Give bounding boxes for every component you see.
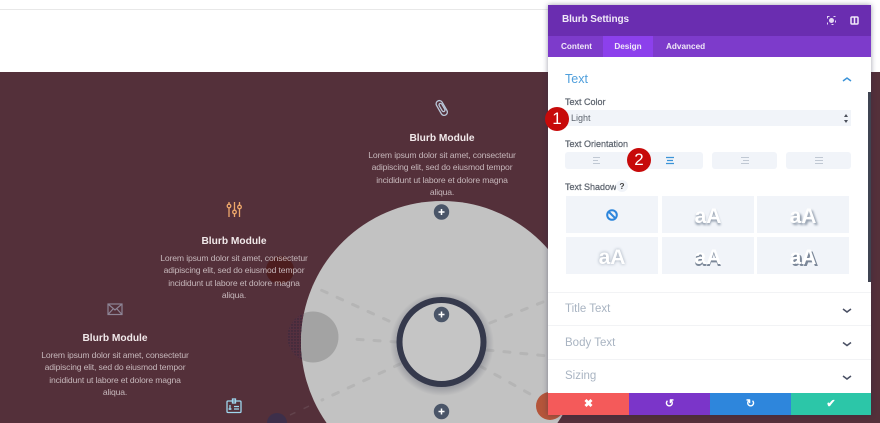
- shadow option: none: [566, 196, 658, 233]
- blurb: left: Blurb Module: [82, 333, 148, 344]
- panel header: [548, 5, 871, 36]
- blurb: middle: incididunt ut labore et dolore magna: [168, 278, 300, 288]
- blurb: left: incididunt ut labore et dolore magna: [49, 375, 181, 385]
- icon: header controls: [827, 16, 859, 25]
- blurb: left: [41, 333, 189, 397]
- footer: undo: ↺: [665, 398, 674, 410]
- footer: save: [791, 393, 871, 415]
- blurb: top: incididunt ut labore et dolore magna: [376, 175, 508, 185]
- blurb: top: Blurb Module: [409, 133, 475, 144]
- scrollbar: [868, 92, 871, 282]
- icon: select arrows: [844, 114, 848, 123]
- accordion: Body Text: Body Text: [565, 337, 615, 349]
- panel title: Blurb Settings: [562, 14, 629, 25]
- decorative dark red circle: [266, 256, 294, 284]
- accordion: Sizing: Sizing: [565, 370, 596, 382]
- shadow option: glow: [566, 237, 658, 274]
- shadow option: hard bottom right: aA: [790, 246, 816, 269]
- blurb: top: aliqua.: [430, 187, 454, 197]
- blurb: middle: adipiscing elit, sed do eiusmod tempor: [164, 265, 304, 275]
- shadow option: bottom: [662, 196, 754, 233]
- blurb: middle: aliqua.: [222, 290, 246, 300]
- shadow option: hard bottom right: [757, 237, 849, 274]
- icon: id badge: [227, 399, 241, 412]
- button: justify: [786, 152, 851, 169]
- icon: paperclip: [435, 99, 449, 117]
- select: Light: [565, 110, 851, 126]
- dashed spokes: [310, 285, 548, 404]
- plus button: bottom: [434, 404, 449, 419]
- label: Text Orientation: Text Orientation: [565, 139, 628, 149]
- shadow option: hard bottom: aA: [695, 246, 721, 269]
- footer: cancel: ✖: [584, 398, 593, 410]
- section heading: Text: Text: [565, 72, 588, 86]
- footer: redo: ↻: [746, 398, 755, 410]
- blurb: top: Lorem ipsum dolor sit amet, consectetur: [368, 150, 516, 160]
- button: align centre: [638, 152, 703, 169]
- icon: sliders: [227, 202, 241, 217]
- accordion: Title Text: Title Text: [565, 303, 610, 315]
- divider: [548, 359, 871, 360]
- footer: redo: [710, 393, 791, 415]
- shadow option: glow: aA: [599, 246, 625, 269]
- icon: envelope: [108, 304, 122, 314]
- tab: Design: Design: [614, 42, 642, 51]
- blurb: middle: [160, 236, 308, 300]
- blurb: top: [368, 133, 516, 197]
- large grey circle: [301, 201, 583, 423]
- footer: undo: [629, 393, 710, 415]
- blurb: left: Lorem ipsum dolor sit amet, consectetur: [41, 350, 189, 360]
- help badge: [616, 180, 628, 192]
- faint dashes outside circle: [290, 400, 322, 415]
- label: Text Color: Text Color: [565, 97, 606, 107]
- label: Text Shadow: Text Shadow: [565, 182, 617, 192]
- button: align left: [565, 152, 630, 169]
- callout badge 1: [545, 107, 569, 131]
- shadow option: hard bottom: [662, 237, 754, 274]
- button: align right: [712, 152, 777, 169]
- top bar line: [0, 9, 548, 10]
- footer: save: ✔: [826, 398, 836, 410]
- shadow option: bottom right: aA: [790, 205, 816, 228]
- blurb: middle: Blurb Module: [201, 236, 267, 247]
- shadow option: bottom right: [757, 196, 849, 233]
- blurb: top: adipiscing elit, sed do eiusmod tempor: [372, 162, 512, 172]
- settings panel: [548, 5, 871, 415]
- orange circle: [536, 392, 564, 420]
- tab: Advanced: Advanced: [666, 42, 705, 51]
- divider: [548, 292, 871, 293]
- icon: chevron up: [842, 77, 852, 82]
- decorative dotted circle: left: [288, 312, 338, 362]
- central ring: [390, 292, 494, 396]
- callout badge 1: 1: [552, 109, 562, 128]
- plus button: centre: [434, 307, 449, 322]
- tab: Content: Content: [561, 42, 592, 51]
- inner grey overlap circle: [301, 312, 338, 362]
- footer: cancel: [548, 393, 629, 415]
- shadow option: bottom: aA: [695, 205, 721, 228]
- plus button: top: [434, 204, 449, 220]
- icon: accordion chevrons: [842, 308, 852, 380]
- divider: [548, 325, 871, 326]
- blurb: middle: Lorem ipsum dolor sit amet, consectetur: [160, 252, 308, 262]
- blurb: left: adipiscing elit, sed do eiusmod tempor: [45, 362, 185, 372]
- tab bar: [548, 36, 871, 57]
- tab: Design: [603, 36, 653, 57]
- callout badge 2: 2: [634, 150, 644, 169]
- diagram artwork: [107, 100, 562, 423]
- help badge: ?: [619, 181, 625, 191]
- select: Light: Light: [571, 113, 591, 123]
- callout badge 2: [627, 148, 651, 172]
- blurb: left: aliqua.: [103, 387, 127, 397]
- decorative dotted circle: bottom: [267, 413, 287, 423]
